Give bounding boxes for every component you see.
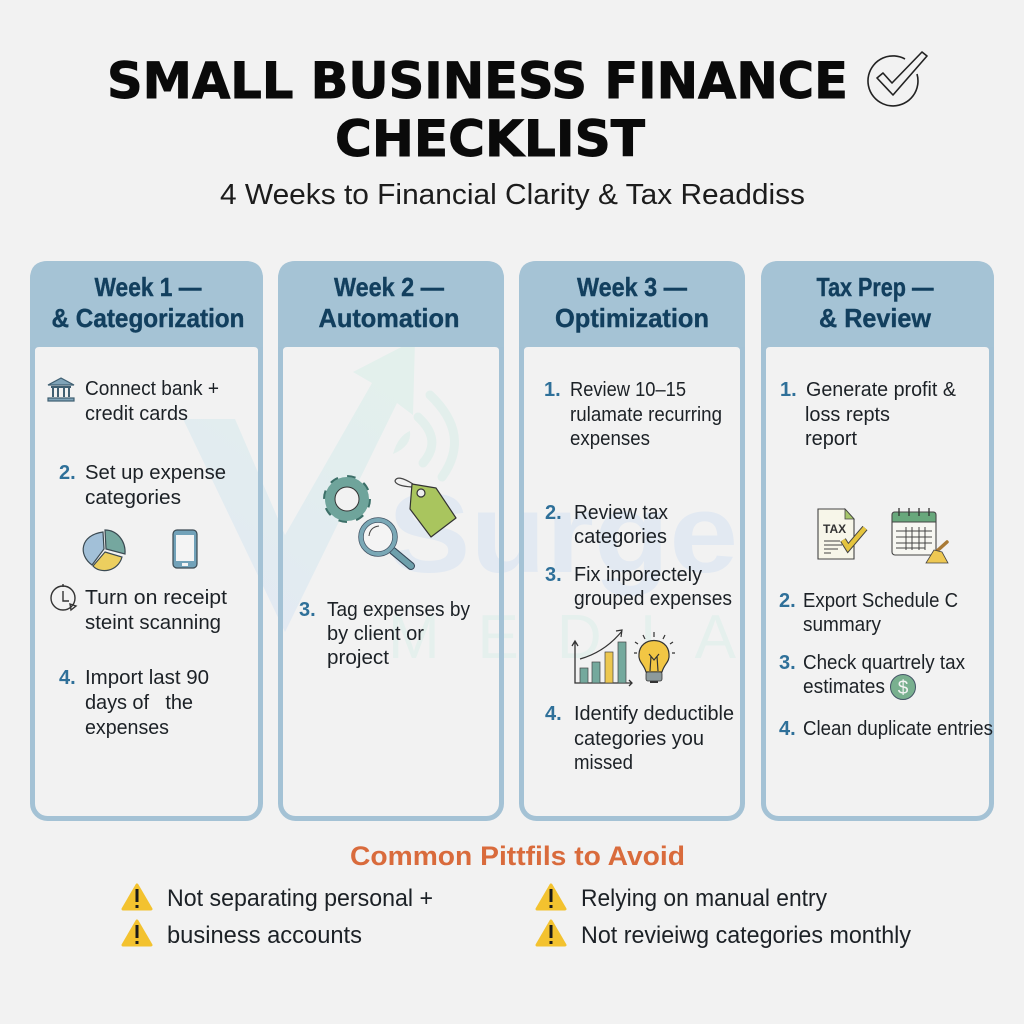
item: connect bank: credit cards xyxy=(85,403,188,425)
item: review recurring: 1. xyxy=(544,379,561,401)
icon: tax document: TAX xyxy=(823,522,846,536)
icon: pie chart xyxy=(83,530,125,571)
heading: week 3: Optimization xyxy=(555,303,709,333)
item: review recurring: rulamate recurring xyxy=(570,404,722,426)
watermark: logo: Surge xyxy=(388,471,738,596)
icon: phone xyxy=(173,530,197,568)
item: connect bank xyxy=(85,378,219,425)
icon: gear xyxy=(327,479,367,519)
heading: pitfalls: Common Pittfils to Avoid xyxy=(350,841,685,871)
icon: clock xyxy=(51,584,76,610)
heading: week 1: Week 1 — xyxy=(94,272,202,302)
item: duplicates: 4. xyxy=(779,718,796,740)
icon: warning xyxy=(123,885,151,909)
panel header: tax prep xyxy=(761,261,994,351)
title: SMALL BUSINESS FINANCE xyxy=(107,52,848,110)
icon: light bulb xyxy=(634,632,675,682)
pitfalls: left column xyxy=(123,885,433,949)
item: expense categories: 2. xyxy=(59,462,76,484)
item: quarterly estimates: Check quartrely tax xyxy=(803,652,965,674)
item: quarterly estimates: estimates xyxy=(803,676,885,698)
item: profit and loss xyxy=(780,379,957,450)
panel: week 3 xyxy=(519,261,745,818)
item: fix grouped: 3. xyxy=(545,564,562,586)
item: schedule c xyxy=(779,590,958,636)
item: schedule c: Export Schedule C xyxy=(803,590,958,612)
item: import expenses: Import last 90 xyxy=(85,667,209,689)
item: schedule c: summary xyxy=(803,614,881,636)
heading: week 2: Week 2 — xyxy=(334,272,444,302)
icon: calendar and broom xyxy=(892,508,948,563)
item: fix grouped xyxy=(545,564,732,610)
item: receipt scanning: steint scanning xyxy=(85,612,221,634)
panel: week 2 xyxy=(278,261,504,818)
item: tag expenses: by client or xyxy=(327,623,424,645)
item: deductible: missed xyxy=(574,752,633,774)
heading: week 3: Week 3 — xyxy=(577,272,687,302)
item: tag expenses: Tag expenses by xyxy=(327,599,470,621)
item: review recurring: Review 10–15 xyxy=(570,379,686,401)
heading: week 3 xyxy=(555,272,709,333)
icon: growth chart xyxy=(572,630,632,686)
item: profit and loss: loss repts xyxy=(805,404,890,426)
pitfalls: left column: business accounts xyxy=(167,922,362,949)
pitfalls: left column: Not separating personal + xyxy=(167,885,433,912)
item: import expenses: 4. xyxy=(59,667,76,689)
item: review tax xyxy=(545,502,668,548)
icon: dollar coin: $ xyxy=(898,678,909,699)
heading: week 2: Automation xyxy=(318,303,460,333)
item: tag expenses xyxy=(299,599,470,669)
item: import expenses xyxy=(59,667,209,739)
watermark: logo: MEDIA xyxy=(388,603,737,672)
item: receipt scanning xyxy=(85,587,227,634)
item: profit and loss: 1. xyxy=(780,379,797,401)
subtitle: 4 Weeks to Financial Clarity & Tax Readdiss xyxy=(220,179,805,211)
item: quarterly estimates xyxy=(779,652,965,698)
item: import expenses: days of the xyxy=(85,692,193,714)
item: tag expenses: 3. xyxy=(299,599,316,621)
heading: tax prep xyxy=(816,272,934,333)
item: tag expenses: project xyxy=(327,647,389,669)
item: receipt scanning: Turn on receipt xyxy=(85,587,227,609)
heading: tax prep: Tax Prep — xyxy=(816,272,934,302)
item: import expenses: expenses xyxy=(85,717,169,739)
item: expense categories xyxy=(59,462,226,509)
item: deductible: 4. xyxy=(545,703,562,725)
item: connect bank: Connect bank + xyxy=(85,378,219,400)
item: deductible xyxy=(545,703,734,774)
item: review recurring xyxy=(544,379,722,450)
item: profit and loss: Generate profit & xyxy=(806,379,957,401)
item: schedule c: 2. xyxy=(779,590,796,612)
icon: warning xyxy=(537,885,565,909)
panel header: week 3 xyxy=(519,261,745,351)
panel: tax prep xyxy=(761,261,994,818)
watermark: logo xyxy=(183,340,738,672)
item: quarterly estimates: 3. xyxy=(779,652,796,674)
item: fix grouped: Fix inporectely xyxy=(574,564,702,586)
panel header: week 1 xyxy=(30,261,263,351)
icon: dollar coin xyxy=(890,674,916,700)
heading: week 1: & Categorization xyxy=(52,303,244,333)
item: review recurring: expenses xyxy=(570,428,650,450)
item: review tax: 2. xyxy=(545,502,562,524)
title xyxy=(107,52,848,168)
item: expense categories: Set up expense xyxy=(85,462,226,484)
pitfalls: right column: Relying on manual entry xyxy=(581,885,828,912)
heading: tax prep: & Review xyxy=(819,303,932,333)
item: expense categories: categories xyxy=(85,487,181,509)
icon: warning xyxy=(537,921,565,945)
item: profit and loss: report xyxy=(805,428,857,450)
icon: warning xyxy=(123,921,151,945)
pitfalls: right column xyxy=(537,885,912,949)
pitfalls: right column: Not revieiwg categories monthly xyxy=(581,922,912,949)
item: review tax: categories xyxy=(574,526,667,548)
icon: magnifier xyxy=(361,520,411,566)
item: deductible: categories you xyxy=(574,728,704,750)
item: deductible: Identify deductible xyxy=(574,703,734,725)
item: review tax: Review tax xyxy=(574,502,668,524)
heading: week 1 xyxy=(52,272,244,333)
icon: title check badge xyxy=(868,52,927,106)
icon: price tag xyxy=(395,478,456,537)
heading: week 2 xyxy=(318,272,460,333)
icon: tax document xyxy=(818,509,865,559)
panel header: week 2 xyxy=(278,261,504,351)
item: duplicates: Clean duplicate entries xyxy=(803,718,993,740)
item: fix grouped: grouped expenses xyxy=(574,588,732,610)
title: CHECKLIST xyxy=(335,110,645,168)
icon: bank xyxy=(48,378,74,401)
panel: week 1 xyxy=(30,261,263,818)
